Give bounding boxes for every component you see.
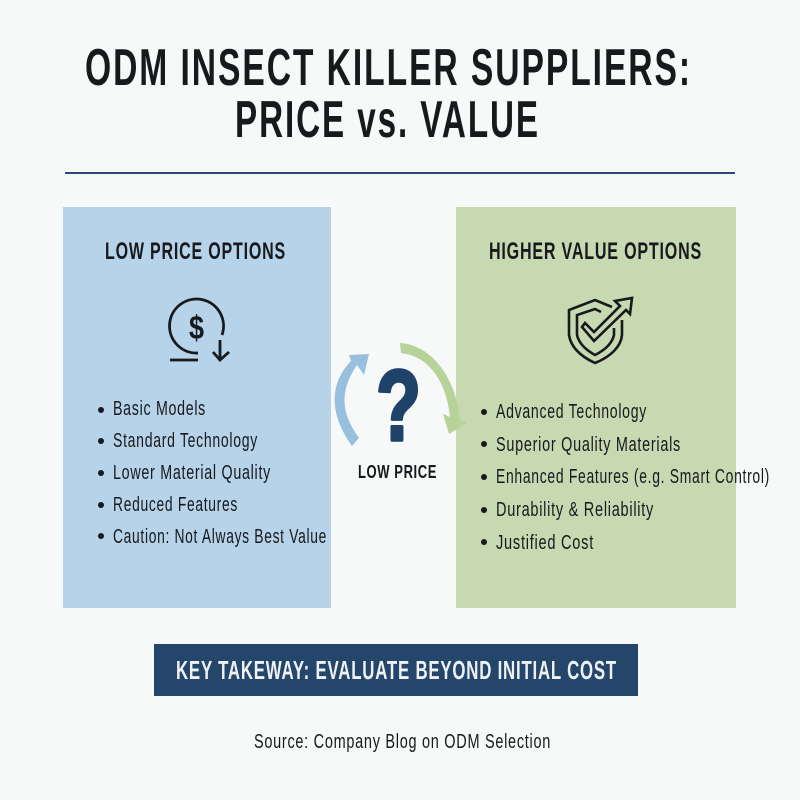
list: low price features: Lower Material Quality [113,462,271,484]
list: low price features: Standard Technology [113,430,258,452]
arrow: blue upward [335,354,369,446]
icon: shield with check arrow [569,298,632,363]
list: low price features: Caution: Not Always Best Value [113,526,327,548]
list: higher value features [481,401,770,554]
heading: higher value options: HIGHER VALUE OPTIONS [489,238,702,265]
list: higher value features: Justified Cost [496,532,594,554]
label: low price: LOW PRICE [358,462,437,482]
list: higher value features: Superior Quality Materials [496,434,681,456]
list: low price features [98,398,327,548]
icon: dollar with down arrow: $ [189,309,204,346]
arrow: green downward [400,343,467,434]
banner: key takeaway [154,644,638,696]
source note: Source: Company Blog on ODM Selection [254,731,551,753]
heading: low price options: LOW PRICE OPTIONS [105,238,286,265]
icon: dollar with down arrow [170,299,229,360]
title: PRICE vs. VALUE [235,91,540,149]
list: higher value features: Durability & Reliability [496,499,654,521]
list: low price features: Basic Models [113,398,206,420]
list: higher value features: Advanced Technology [496,401,647,423]
center: question and cycle arrows [335,343,467,482]
list: low price features: Reduced Features [113,494,238,516]
panel: higher value options [456,207,770,608]
panel: low price options [63,207,331,608]
icon: question mark: ? [376,350,421,462]
title [85,39,692,149]
